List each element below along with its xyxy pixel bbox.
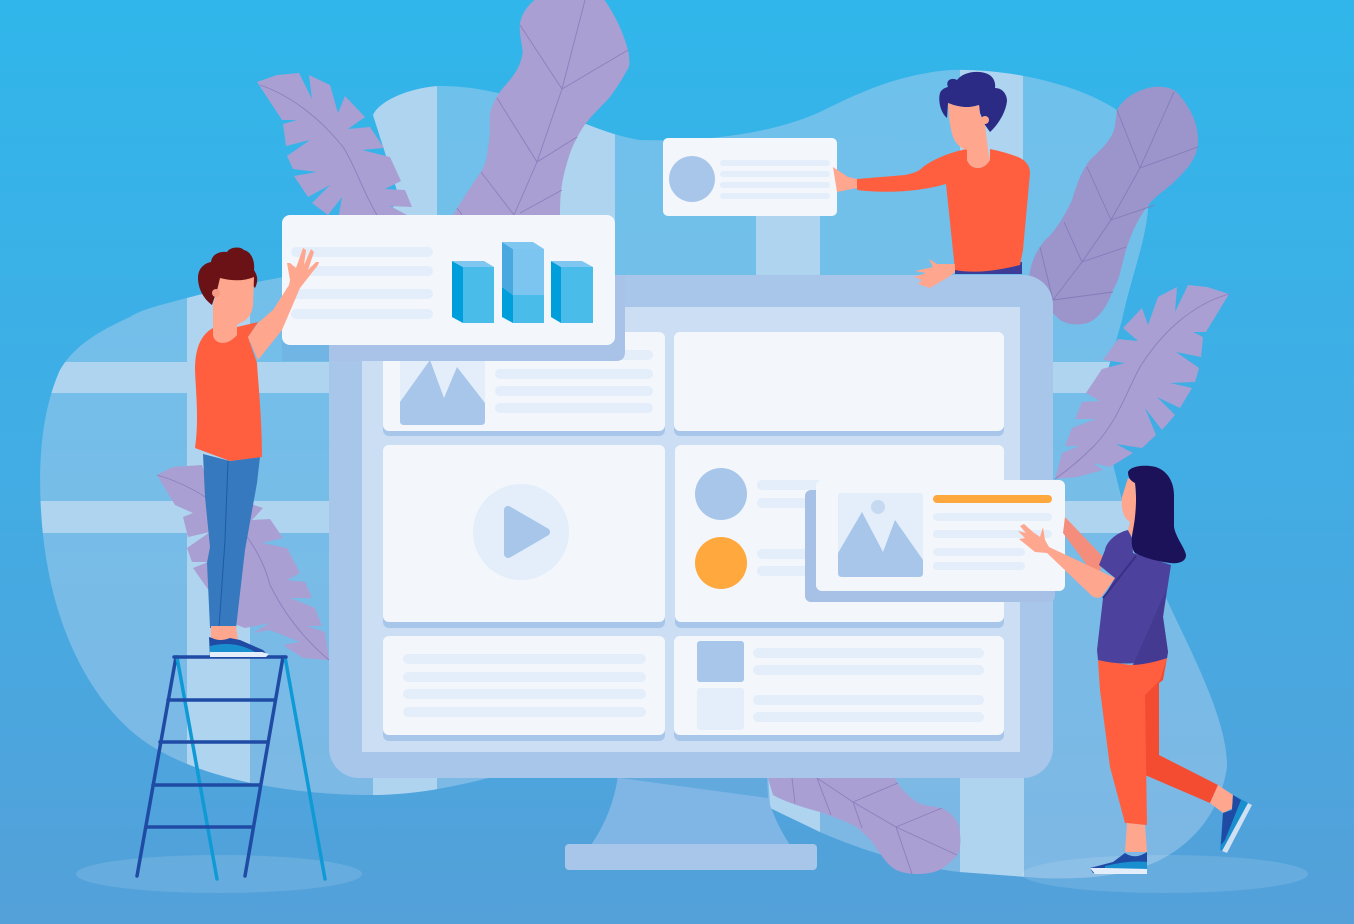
front leg (1098, 658, 1167, 825)
person: man on ladder (195, 248, 319, 657)
shirt (195, 322, 262, 461)
leaf: left feather (157, 465, 329, 660)
monitor (329, 275, 1053, 778)
person: man at top (833, 72, 1030, 288)
sweater (857, 149, 1030, 272)
leaf: top centre (445, 0, 629, 225)
leaf: right top (1029, 87, 1198, 324)
ground shadows (76, 855, 1308, 893)
person: woman (1018, 466, 1252, 874)
panel: video (383, 445, 665, 628)
panel: blank (674, 332, 1004, 436)
arm and hand (1018, 524, 1115, 598)
card: image and text (805, 480, 1065, 602)
face (213, 277, 254, 343)
panel: image and text (383, 332, 665, 436)
jeans (203, 454, 260, 628)
leaf: top left feather (257, 73, 412, 225)
hair (939, 72, 1007, 132)
face (1122, 478, 1137, 537)
panel: list (674, 636, 1004, 741)
leaf: bottom (767, 775, 960, 874)
background blob (40, 60, 1227, 880)
face (948, 103, 990, 168)
rear leg (1145, 658, 1218, 803)
bar chart (452, 242, 593, 323)
arm and hand (248, 248, 319, 360)
panel: circles (675, 445, 1004, 628)
card: profile (663, 138, 837, 216)
rear shoe (1220, 795, 1252, 853)
leaf: right feather (1055, 285, 1229, 479)
front shoe (1090, 852, 1147, 874)
shoe (209, 637, 269, 657)
hair (1128, 466, 1186, 563)
hair (198, 248, 257, 305)
hand on monitor (914, 259, 955, 288)
ladder (137, 657, 325, 879)
panel: text lines (383, 636, 665, 741)
monitor stand (565, 775, 817, 870)
card: bar chart (282, 215, 625, 361)
top (1097, 530, 1171, 665)
